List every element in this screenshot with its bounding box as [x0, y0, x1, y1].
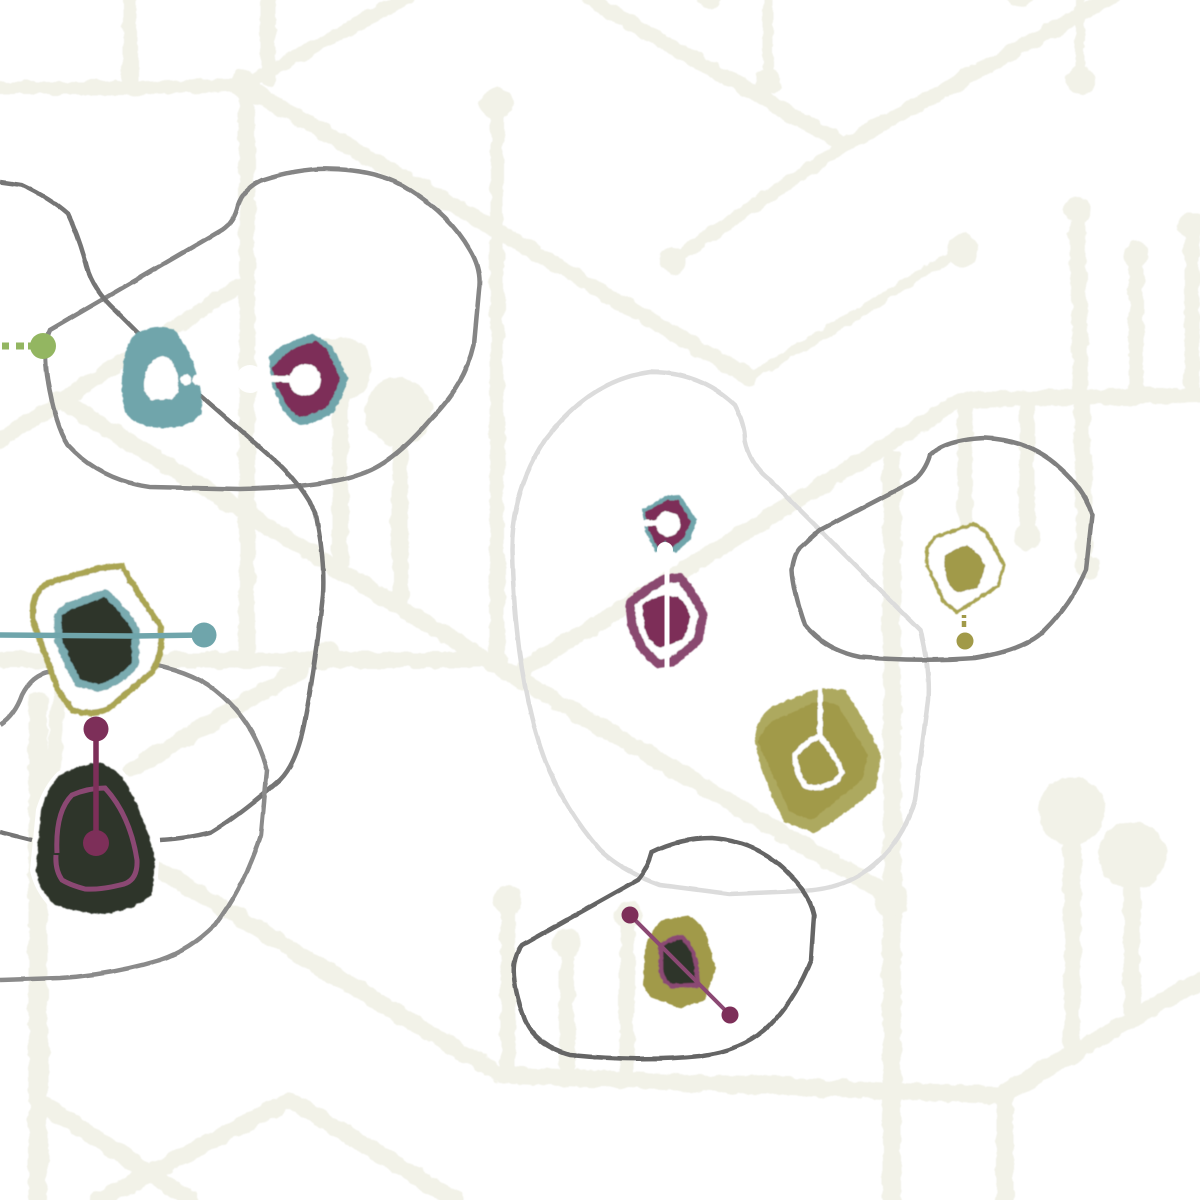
grey outline: upper left region — [46, 169, 480, 489]
cell: magenta ring with split — [630, 570, 703, 670]
grey outline: lower left region — [0, 662, 267, 980]
grey outline: long left boundary — [0, 182, 323, 840]
cell: bottom olive with dark core — [622, 906, 738, 1024]
cell: teal with white core — [122, 327, 204, 428]
grey outline: bottom region — [514, 838, 814, 1059]
cell: small olive with ring — [927, 524, 1004, 650]
cell: dark with teal rim and olive ring — [0, 566, 216, 713]
cell: large dark with magenta ring — [34, 716, 155, 916]
cell: large olive — [755, 686, 881, 833]
cell: magenta with teal rim — [236, 334, 348, 425]
connector dot: white link — [657, 542, 673, 558]
large light grey outline — [512, 372, 928, 894]
grey outline: right region — [792, 438, 1092, 660]
green connector node — [2, 333, 56, 359]
cell: small magenta with teal rim — [642, 495, 697, 553]
